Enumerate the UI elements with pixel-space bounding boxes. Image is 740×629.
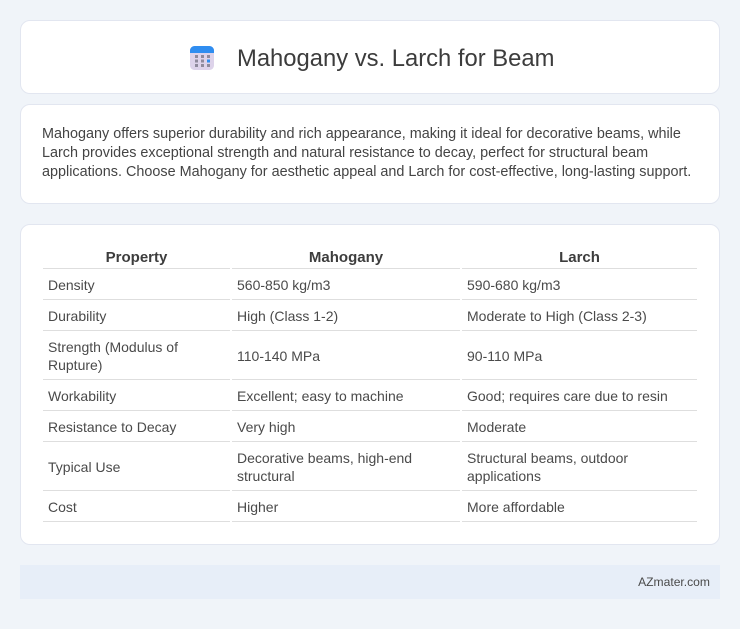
comparison table: applications — [467, 468, 541, 484]
comparison table: Property — [106, 249, 167, 266]
comparison table: Larch — [559, 249, 600, 266]
comparison table: Mahogany — [309, 249, 383, 266]
comparison table: 110-140 MPa — [237, 348, 320, 364]
comparison table: Decorative beams, high-end — [237, 450, 412, 466]
panel: summary card — [20, 104, 720, 204]
footer bar — [20, 565, 720, 599]
summary text: applications. Choose Mahogany for aesthetic appeal and Larch for cost-effective, long-lasting support. — [42, 164, 691, 180]
panel: title card — [20, 20, 720, 94]
icon: calendar — [190, 46, 214, 70]
comparison table: 590-680 kg/m3 — [467, 277, 560, 293]
comparison table: More affordable — [467, 499, 565, 515]
summary text: Mahogany offers superior durability and rich appearance, making it ideal for decorative beams, while — [42, 126, 681, 142]
comparison table: Strength (Modulus of — [48, 339, 178, 355]
comparison table: Excellent; easy to machine — [237, 388, 404, 404]
summary text: Larch provides exceptional strength and natural resistance to decay, perfect for structural beam — [42, 145, 648, 161]
comparison table: Good; requires care due to resin — [467, 388, 668, 404]
footer credit: AZmater.com — [638, 575, 710, 589]
comparison table: 90-110 MPa — [467, 348, 542, 364]
comparison table: Durability — [48, 308, 106, 324]
comparison table: Rupture) — [48, 357, 102, 373]
comparison table: Resistance to Decay — [48, 419, 176, 435]
comparison table: Density — [48, 277, 95, 293]
comparison table: Typical Use — [48, 459, 120, 475]
comparison table: structural — [237, 468, 295, 484]
comparison table: High (Class 1-2) — [237, 308, 338, 324]
comparison table: Workability — [48, 388, 116, 404]
comparison table: Higher — [237, 499, 278, 515]
comparison table: Cost — [48, 499, 77, 515]
comparison table: Very high — [237, 419, 295, 435]
title: Mahogany vs. Larch for Beam — [237, 45, 554, 72]
comparison table: Moderate — [467, 419, 526, 435]
panel: comparison table — [20, 224, 720, 545]
comparison table: 560-850 kg/m3 — [237, 277, 330, 293]
summary text — [42, 126, 691, 180]
comparison table: Structural beams, outdoor — [467, 450, 628, 466]
comparison table: Moderate to High (Class 2-3) — [467, 308, 647, 324]
